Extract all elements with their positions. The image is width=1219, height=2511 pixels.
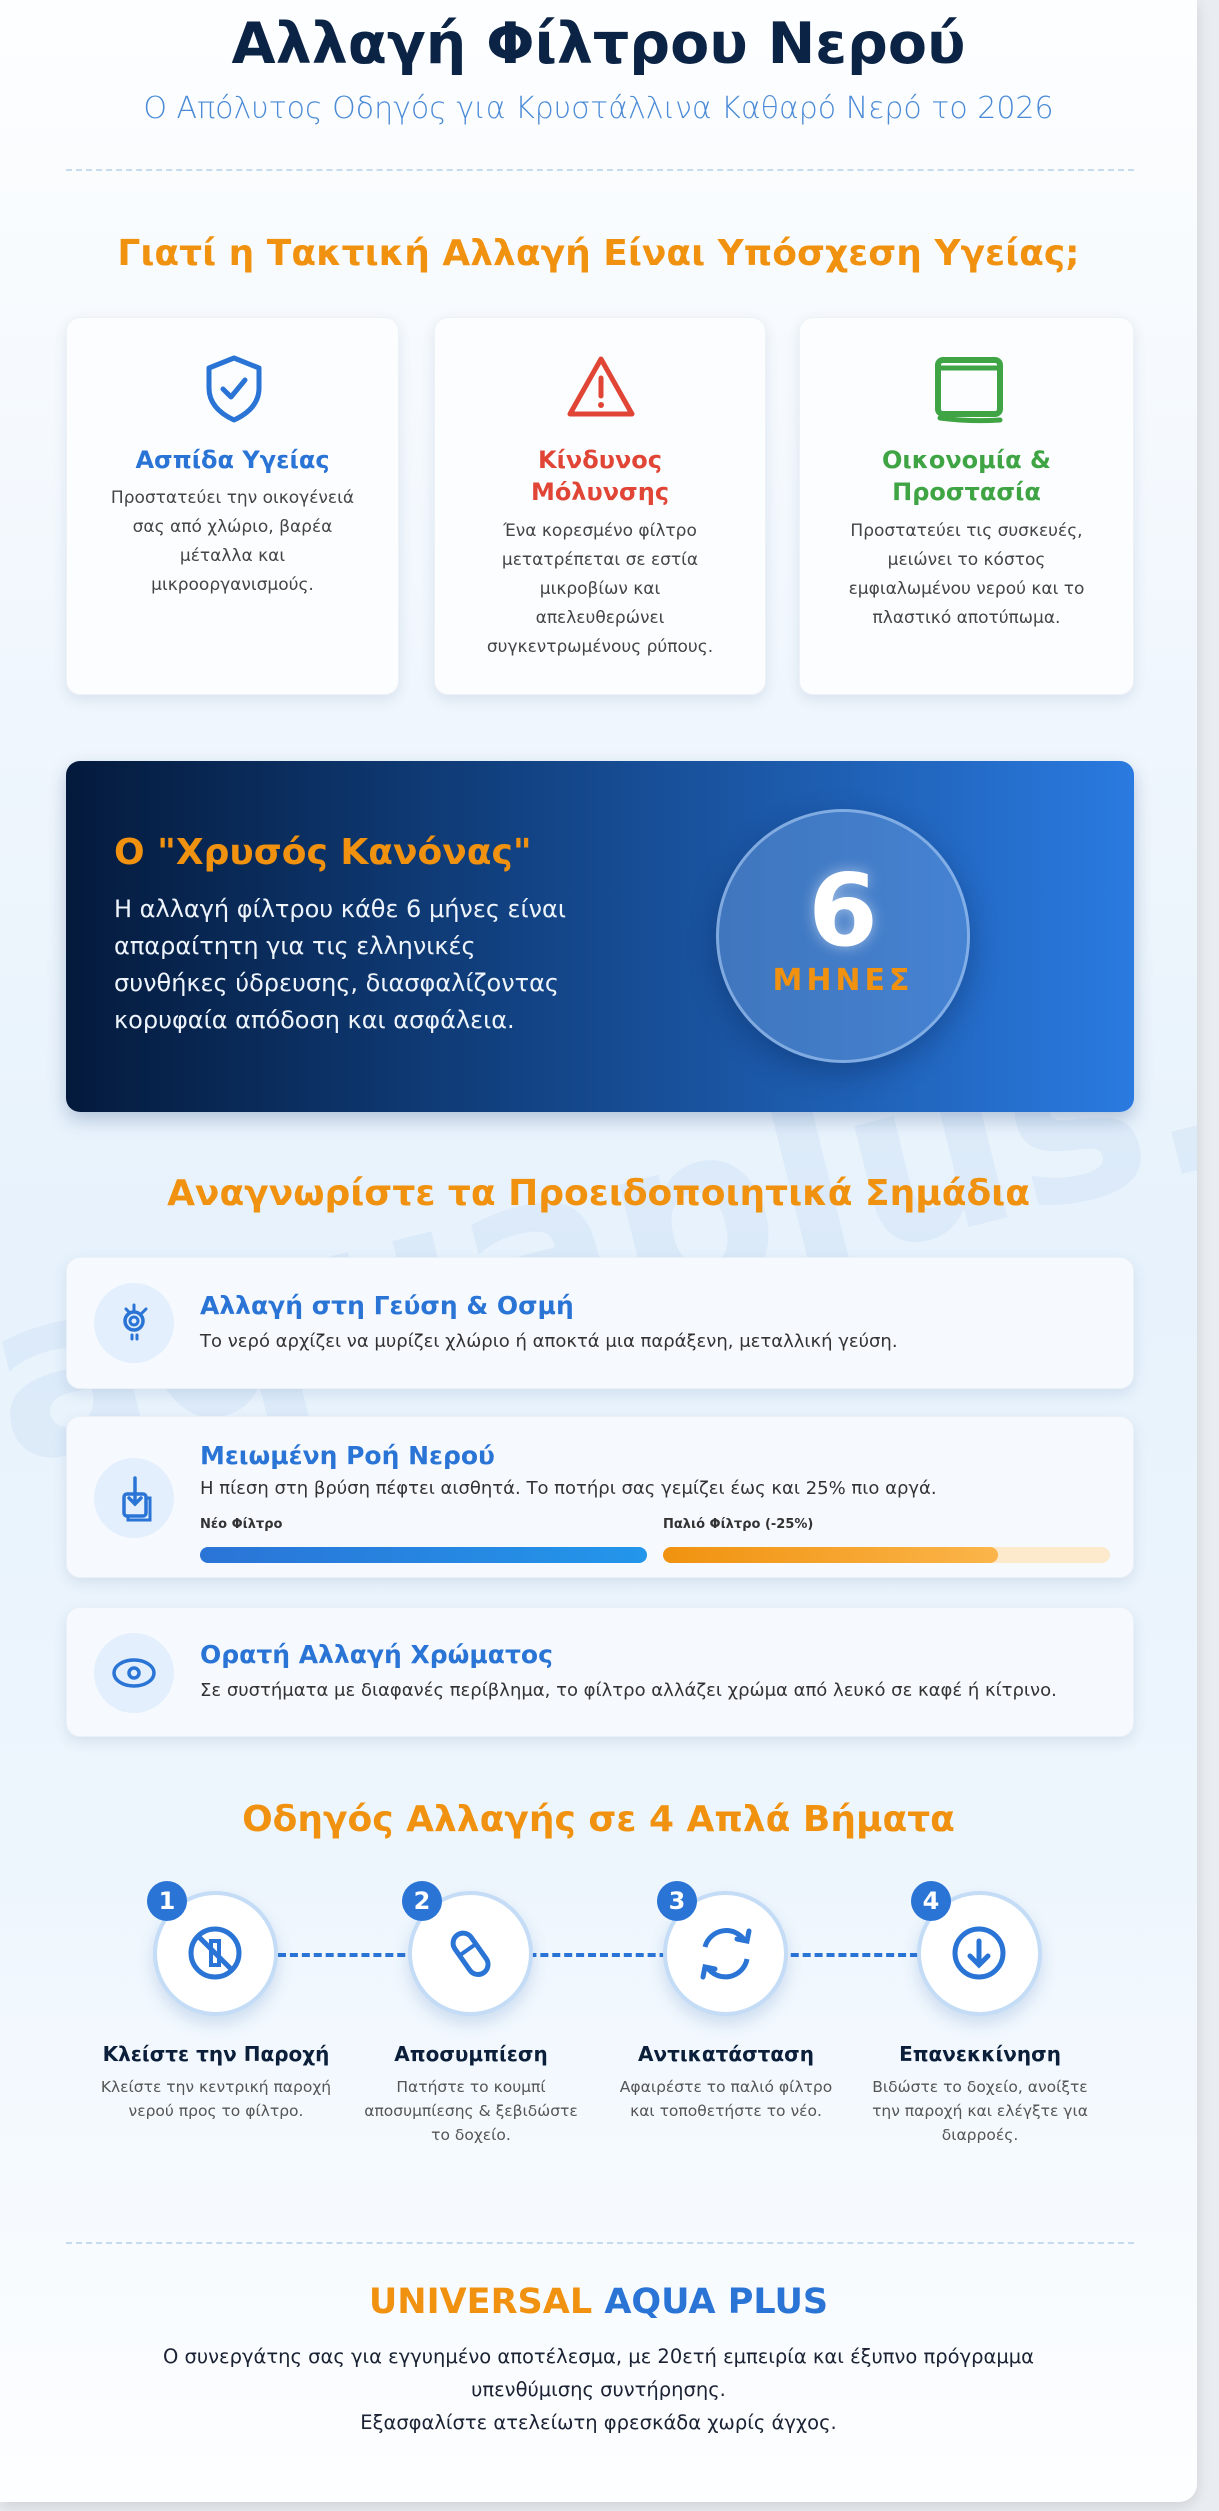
step 3: 3 [669,1887,685,1915]
card title: Μόλυνσης [531,478,669,506]
step 1: Κλείστε την κεντρική παροχή νερού προς το φίλτρο. [101,2078,331,2120]
step 3 [620,1881,832,2120]
step 3: Αντικατάσταση [638,2042,814,2066]
bar chart: flow comparison: Νέο Φίλτρο [200,1517,282,1532]
card title [882,446,1051,506]
icon: flow [94,1458,174,1538]
panel: economy [799,317,1134,695]
panel: contamination [434,317,766,695]
icon: warning [568,356,634,416]
step 1: Κλείστε την Παροχή [103,2042,329,2066]
sign: reduced flow [66,1416,1134,1578]
bar chart: flow comparison [200,1517,1110,1563]
icon: shield [206,356,262,422]
heading: steps: Οδηγός Αλλαγής σε 4 Απλά Βήματα [242,1799,955,1840]
card title: Κίνδυνος [538,446,662,474]
icon: eye [94,1633,174,1713]
heading: why: Γιατί η Τακτική Αλλαγή Είναι Υπόσχεση Υγείας; [117,233,1080,274]
closing text: Ο συνεργάτης σας για εγγυημένο αποτέλεσμα, με 20ετή εμπειρία και έξυπνο πρόγραμμα υπενθύμισης συντήρησης. [163,2345,1034,2401]
bar chart: flow comparison: Παλιό Φίλτρο (-25%) [663,1517,813,1532]
step 2: Πατήστε το κουμπί αποσυμπίεσης & ξεβιδώστε το δοχείο. [364,2078,578,2144]
icon: taste [94,1283,174,1363]
panel: health shield [66,317,399,695]
card title: Οικονομία & [882,446,1051,474]
sign: colour change: Ορατή Αλλαγή Χρώματος [200,1640,553,1669]
sign: reduced flow: Η πίεση στη βρύση πέφτει αισθητά. Το ποτήρι σας γεμίζει έως και 25% πιο αργά. [200,1478,937,1499]
sign: taste & smell: Αλλαγή στη Γεύση & Οσμή [200,1291,574,1320]
step 1 [101,1881,331,2120]
icon: green box [935,357,1003,424]
circle: 6 months: 6 [808,852,878,969]
title: Αλλαγή Φίλτρου Νερού [232,11,965,77]
step 2 [364,1881,578,2144]
card title [531,446,669,506]
sign: colour change [66,1607,1134,1737]
sign: taste & smell [66,1257,1134,1389]
circle: 6 months [716,809,970,1063]
brand: UNIVERSAL AQUA PLUS [369,2282,828,2322]
card title: Ασπίδα Υγείας [135,446,330,474]
panel: golden rule [66,761,1134,1112]
step 4: Βιδώστε το δοχείο, ανοίξτε την παροχή και ελέγξτε για διαρροές. [872,2078,1088,2144]
steps timeline [101,1881,1088,2144]
circle: 6 months: ΜΗΝΕΣ [772,963,914,998]
heading: warning signs: Αναγνωρίστε τα Προειδοποιητικά Σημάδια [167,1173,1030,1214]
subtitle: Ο Απόλυτος Οδηγός για Κρυστάλλινα Καθαρό Νερό το 2026 [143,91,1054,126]
sign: colour change: Σε συστήματα με διαφανές περίβλημα, το φίλτρο αλλάζει χρώμα από λευκό σε καφέ ή κίτρινο. [200,1680,1057,1701]
card text: Ένα κορεσμένο φίλτρο μετατρέπεται σε εστία μικροβίων και απελευθερώνει συγκεντρωμένους ρύπους. [487,521,713,657]
step 1: 1 [159,1887,175,1915]
sign: reduced flow: Μειωμένη Ροή Νερού [200,1441,495,1470]
step 2: 2 [414,1887,430,1915]
step 3: Αφαιρέστε το παλιό φίλτρο και τοποθετήστε το νέο. [620,2078,832,2120]
step 4: Επανεκκίνηση [899,2042,1061,2066]
step 4 [872,1881,1088,2144]
step 4: 4 [923,1887,939,1915]
golden rule heading: Ο "Χρυσός Κανόνας" [114,832,532,873]
card text: Προστατεύει τις συσκευές, μειώνει το κόστος εμφιαλωμένου νερού και το πλαστικό αποτύπωμα. [849,521,1084,628]
closing text [163,2345,1034,2434]
sign: taste & smell: Το νερό αρχίζει να μυρίζει χλώριο ή αποκτά μια παράξενη, μεταλλική γεύση. [200,1331,898,1352]
golden rule text: Η αλλαγή φίλτρου κάθε 6 μήνες είναι απαραίτητη για τις ελληνικές συνθήκες ύδρευσης, διασφαλίζοντας κορυφαία απόδοση και ασφάλεια. [114,895,566,1034]
step 2: Αποσυμπίεση [394,2042,548,2066]
closing text: Εξασφαλίστε ατελείωτη φρεσκάδα χωρίς άγχος. [360,2411,837,2434]
card text: Προστατεύει την οικογένειά σας από χλώριο, βαρέα μέταλλα και μικροοργανισμούς. [111,488,354,595]
card title: Προστασία [892,478,1041,506]
